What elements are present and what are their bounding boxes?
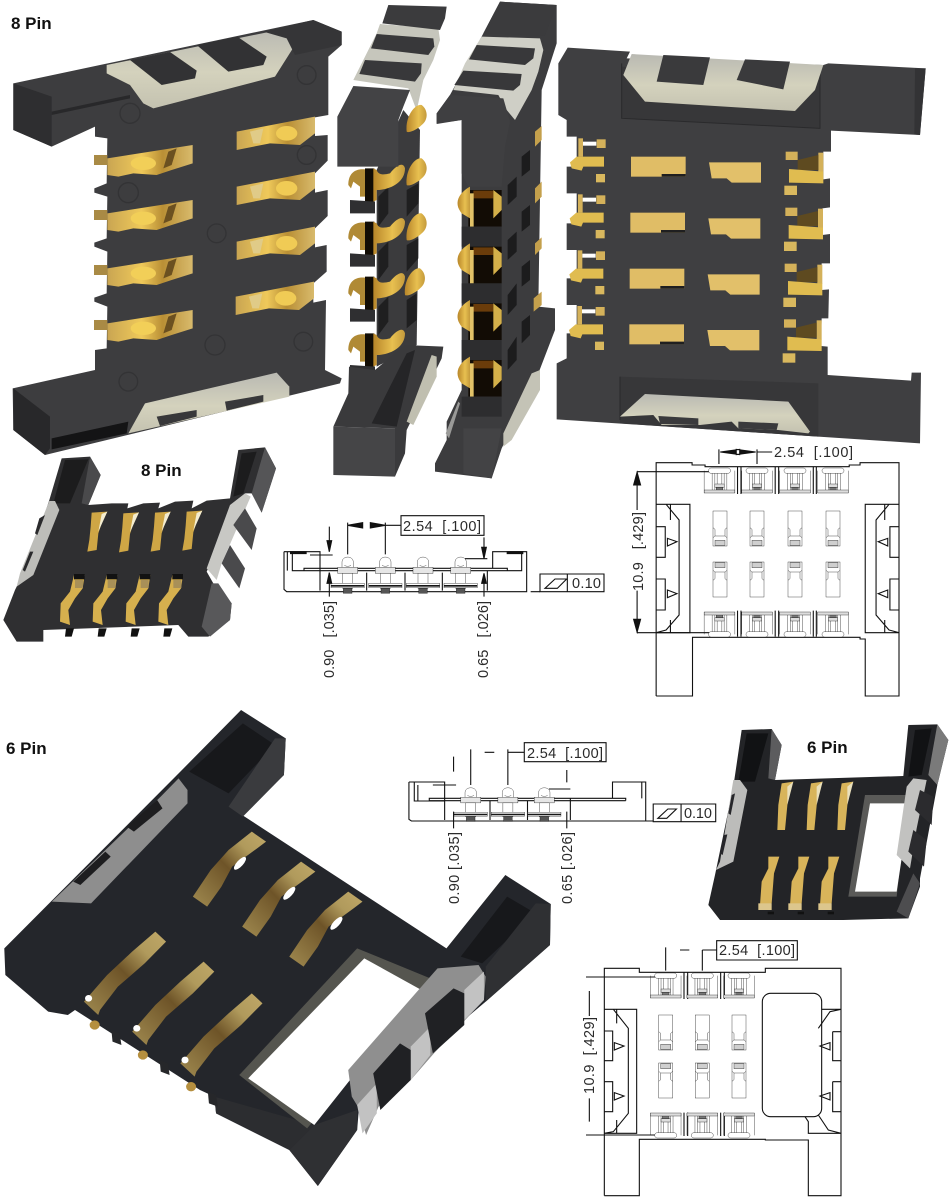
dimension text 0.65 8 pin: 0.65 [.026] xyxy=(476,601,492,678)
flatness box xyxy=(653,804,716,822)
silver clip right xyxy=(348,965,486,1135)
photo: 8 pin small perspective view xyxy=(3,447,276,642)
bottom metal clip xyxy=(52,373,289,449)
photo: 8 pin connector side view left xyxy=(333,5,447,477)
dimension box xyxy=(717,941,797,960)
drawing: 8 pin side elevation xyxy=(284,516,604,597)
flatness value 8 pin: 0.10 xyxy=(572,576,601,592)
gold contacts grid xyxy=(569,138,823,363)
dimension text 2.54 top 8 pin: 2.54 [.100] xyxy=(774,445,853,461)
flatness box xyxy=(540,574,604,592)
dimension text 10.9 6 pin: 10.9 [.429] xyxy=(582,1017,598,1094)
label: 8 Pin small view: 8 Pin xyxy=(141,461,182,480)
silver clip left xyxy=(52,778,187,903)
dimension text 2.54 top 6 pin: 2.54 [.100] xyxy=(719,943,795,959)
dimension box xyxy=(401,516,484,535)
top metal clip xyxy=(107,20,342,108)
dimension text 2.54 side 6 pin: 2.54 [.100] xyxy=(527,746,603,762)
window cut-out xyxy=(239,948,430,1128)
silver clip bottom xyxy=(620,394,810,433)
label: 6 Pin large view: 6 Pin xyxy=(6,739,47,758)
bronze contacts xyxy=(84,832,362,1107)
photo: 8 pin connector underside view xyxy=(13,20,342,455)
photo: 8 pin connector side view right xyxy=(435,2,557,478)
dimension text 10.9 8 pin: 10.9 [.429] xyxy=(631,512,647,591)
gold contacts xyxy=(94,117,315,342)
photo: 6 pin large perspective view xyxy=(4,710,551,1186)
dimension text 0.65 6 pin: 0.65 [.026] xyxy=(560,832,576,904)
label: 6 Pin small view: 6 Pin xyxy=(807,738,848,757)
drawing: 6 pin side elevation xyxy=(409,743,716,828)
drawing: 6 pin top plan xyxy=(586,941,841,1196)
dimension text 2.54 side 8 pin: 2.54 [.100] xyxy=(403,519,481,535)
drawing: 8 pin top plan xyxy=(634,449,899,696)
dimension text 0.90 8 pin: 0.90 [.035] xyxy=(322,601,338,678)
silver clip top xyxy=(623,54,823,111)
dimension box xyxy=(524,743,606,762)
flatness value 6 pin: 0.10 xyxy=(684,806,712,822)
photo: 6 pin small perspective view xyxy=(708,724,948,920)
dimension text 0.90 6 pin: 0.90 [.035] xyxy=(447,832,463,904)
label: 8 Pin top: 8 Pin xyxy=(11,14,52,33)
photo: 8 pin connector bottom view xyxy=(557,48,926,443)
